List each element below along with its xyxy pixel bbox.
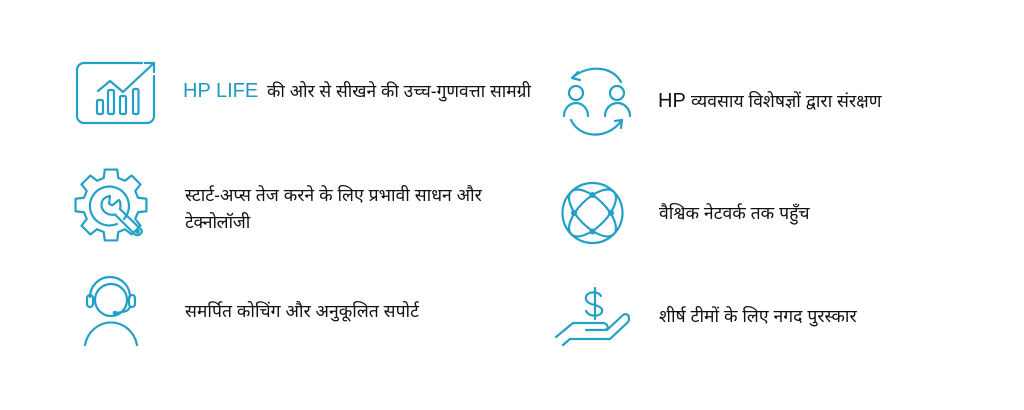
text: start-up tools: स्टार्ट-अप्स तेज करने के लिए प्रभावी साधन और (185, 185, 482, 205)
icon: gear and wrench (74, 168, 148, 242)
text: cash prizes: शीर्ष टीमों के लिए नगद पुरस्कार (659, 306, 857, 326)
icon: hand with dollar (554, 286, 630, 346)
icon: person with headset (84, 276, 138, 346)
text: की ओर से सीखने की उच्च-गुणवत्ता सामग्री (267, 81, 531, 101)
icon: growth chart (76, 62, 156, 124)
text: start-up tools: टेक्नोलॉजी (185, 212, 250, 232)
text: global network access: वैश्विक नेटवर्क तक पहुँच (659, 203, 810, 223)
icon: global network (561, 182, 624, 244)
text: HP business experts: HP (658, 90, 686, 112)
text: HP business experts (658, 90, 882, 112)
text: coaching and support: समर्पित कोचिंग और अनुकूलित सपोर्ट (185, 301, 419, 321)
text: start-up tools (185, 185, 482, 232)
text: व्यवसाय विशेषज्ञों द्वारा संरक्षण (691, 91, 881, 111)
text: HP LIFE content (183, 80, 532, 102)
text: HP LIFE content: HP LIFE (183, 80, 258, 102)
icon: two people exchange (562, 68, 632, 136)
